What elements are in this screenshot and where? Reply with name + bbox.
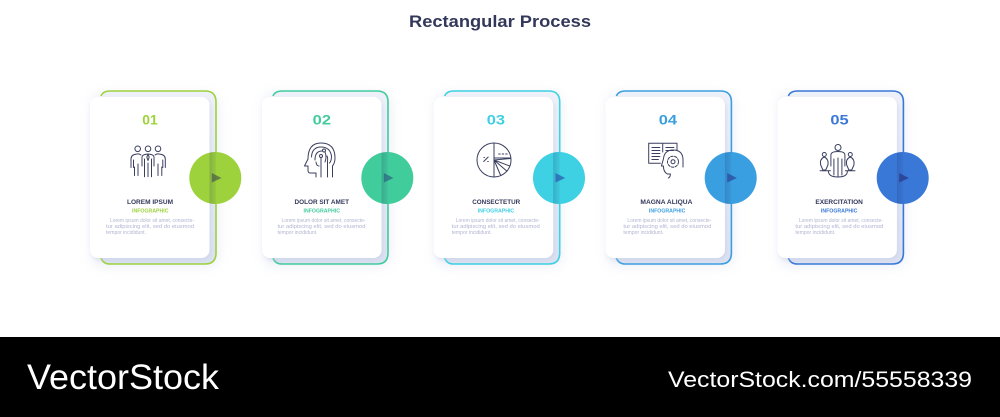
description: tempor incididunt.	[795, 230, 835, 236]
step label: INFOGRAPHIC	[478, 209, 515, 215]
card	[434, 97, 553, 258]
step label: INFOGRAPHIC	[304, 209, 340, 215]
description: Lorem ipsum dolor sit amet, consecte-	[282, 218, 366, 224]
icon: team of people	[131, 146, 165, 177]
step name: CONSECTETUR	[472, 199, 521, 206]
number: 05	[830, 112, 849, 128]
card	[605, 97, 725, 258]
outline frame	[616, 91, 731, 264]
outline frame	[273, 91, 388, 264]
number: 01	[142, 112, 158, 128]
outline frame	[788, 91, 903, 264]
footer logo: VectorStock	[27, 358, 220, 397]
description: Lorem ipsum dolor sit amet, consecte-	[456, 218, 540, 224]
number: 02	[313, 112, 331, 128]
description: tempor incididunt.	[623, 230, 663, 236]
icon: pie chart	[477, 143, 511, 177]
description: tur adipiscing elit, sed do eiusmod	[623, 224, 712, 230]
description: tur adipiscing elit, sed do eiusmod	[795, 224, 884, 230]
step name: DOLOR SIT AMET	[294, 199, 349, 206]
panel: step 04	[605, 91, 757, 266]
description	[795, 218, 884, 236]
arrow button	[533, 152, 585, 204]
outline frame	[445, 91, 560, 264]
number: 04	[659, 112, 677, 128]
arrow button	[361, 152, 413, 204]
panel: step 02	[262, 91, 413, 266]
description: tur adipiscing elit, sed do eiusmod	[106, 224, 194, 230]
description: Lorem ipsum dolor sit amet, consecte-	[627, 218, 712, 224]
step name: LOREM IPSUM	[127, 199, 173, 206]
description	[452, 218, 540, 236]
outline frame	[101, 91, 216, 264]
footer image id: VectorStock.com/55558339	[668, 367, 972, 392]
description: tempor incididunt.	[106, 230, 146, 236]
footer bar	[0, 337, 1000, 417]
arrow button	[877, 152, 929, 204]
step name: EXERCITATION	[815, 199, 863, 206]
arrow button	[189, 152, 241, 204]
step name: MAGNA ALIQUA	[640, 199, 693, 206]
panel: step 05	[777, 91, 929, 266]
description	[623, 218, 712, 236]
number: 03	[487, 112, 505, 128]
panel: step 03	[434, 91, 585, 266]
card	[262, 97, 382, 258]
icon: head with circuit	[304, 143, 335, 177]
description: tempor incididunt.	[452, 230, 492, 236]
description	[106, 218, 194, 236]
step label: INFOGRAPHIC	[132, 209, 169, 215]
description: tempor incididunt.	[278, 230, 318, 236]
panel: step 01	[90, 91, 241, 266]
description	[278, 218, 366, 236]
icon: book and head with gear	[649, 143, 683, 178]
description: tur adipiscing elit, sed do eiusmod	[278, 224, 366, 230]
arrow button	[705, 152, 757, 204]
title: Rectangular Process	[409, 12, 591, 31]
card	[90, 97, 210, 258]
description: Lorem ipsum dolor sit amet, consecte-	[110, 218, 194, 224]
card	[777, 97, 897, 258]
step label: INFOGRAPHIC	[649, 209, 686, 215]
description: tur adipiscing elit, sed do eiusmod	[452, 224, 540, 230]
description: Lorem ipsum dolor sit amet, consecte-	[799, 218, 883, 224]
icon: leader and two people	[820, 144, 855, 177]
step label: INFOGRAPHIC	[821, 209, 858, 215]
